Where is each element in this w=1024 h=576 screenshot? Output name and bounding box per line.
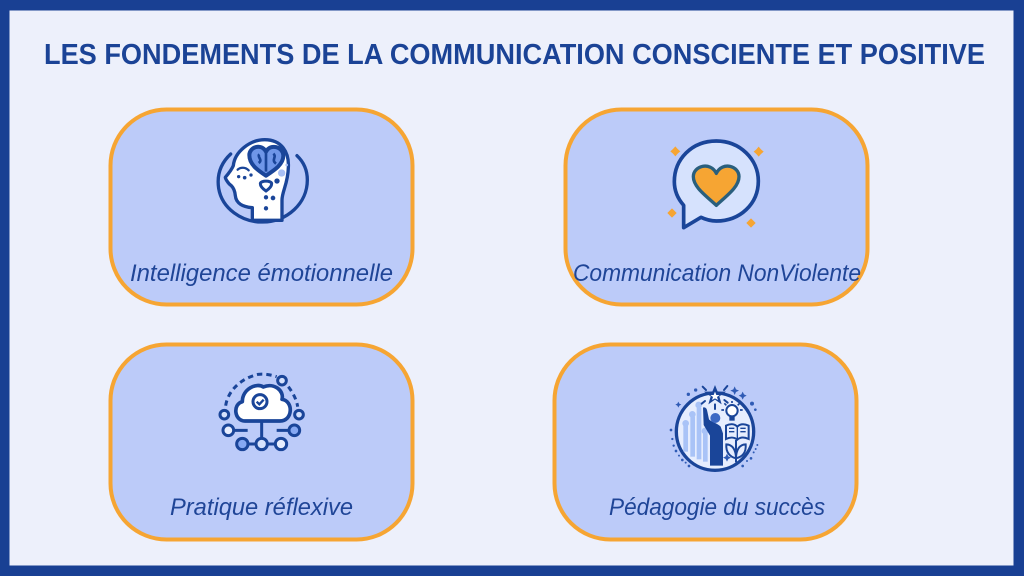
icon: cloud network [220,374,303,450]
panel: Communication NonViolente [566,110,868,304]
panel: Pratique réflexive [110,344,412,540]
label: Pédagogie du succès [609,494,825,521]
title: LES FONDEMENTS DE LA COMMUNICATION CONSCIENTE ET POSITIVE [44,39,985,71]
label: Intelligence émotionnelle [130,260,393,287]
label: Pratique réflexive [170,494,353,521]
icon: person reaching for star [670,385,758,470]
panel: Pédagogie du succès [554,344,856,540]
icon: speech bubble with heart [667,141,764,228]
panel: Intelligence émotionnelle [110,110,412,304]
icon: head with heart brain [218,140,307,222]
label: Communication NonViolente [573,260,861,287]
